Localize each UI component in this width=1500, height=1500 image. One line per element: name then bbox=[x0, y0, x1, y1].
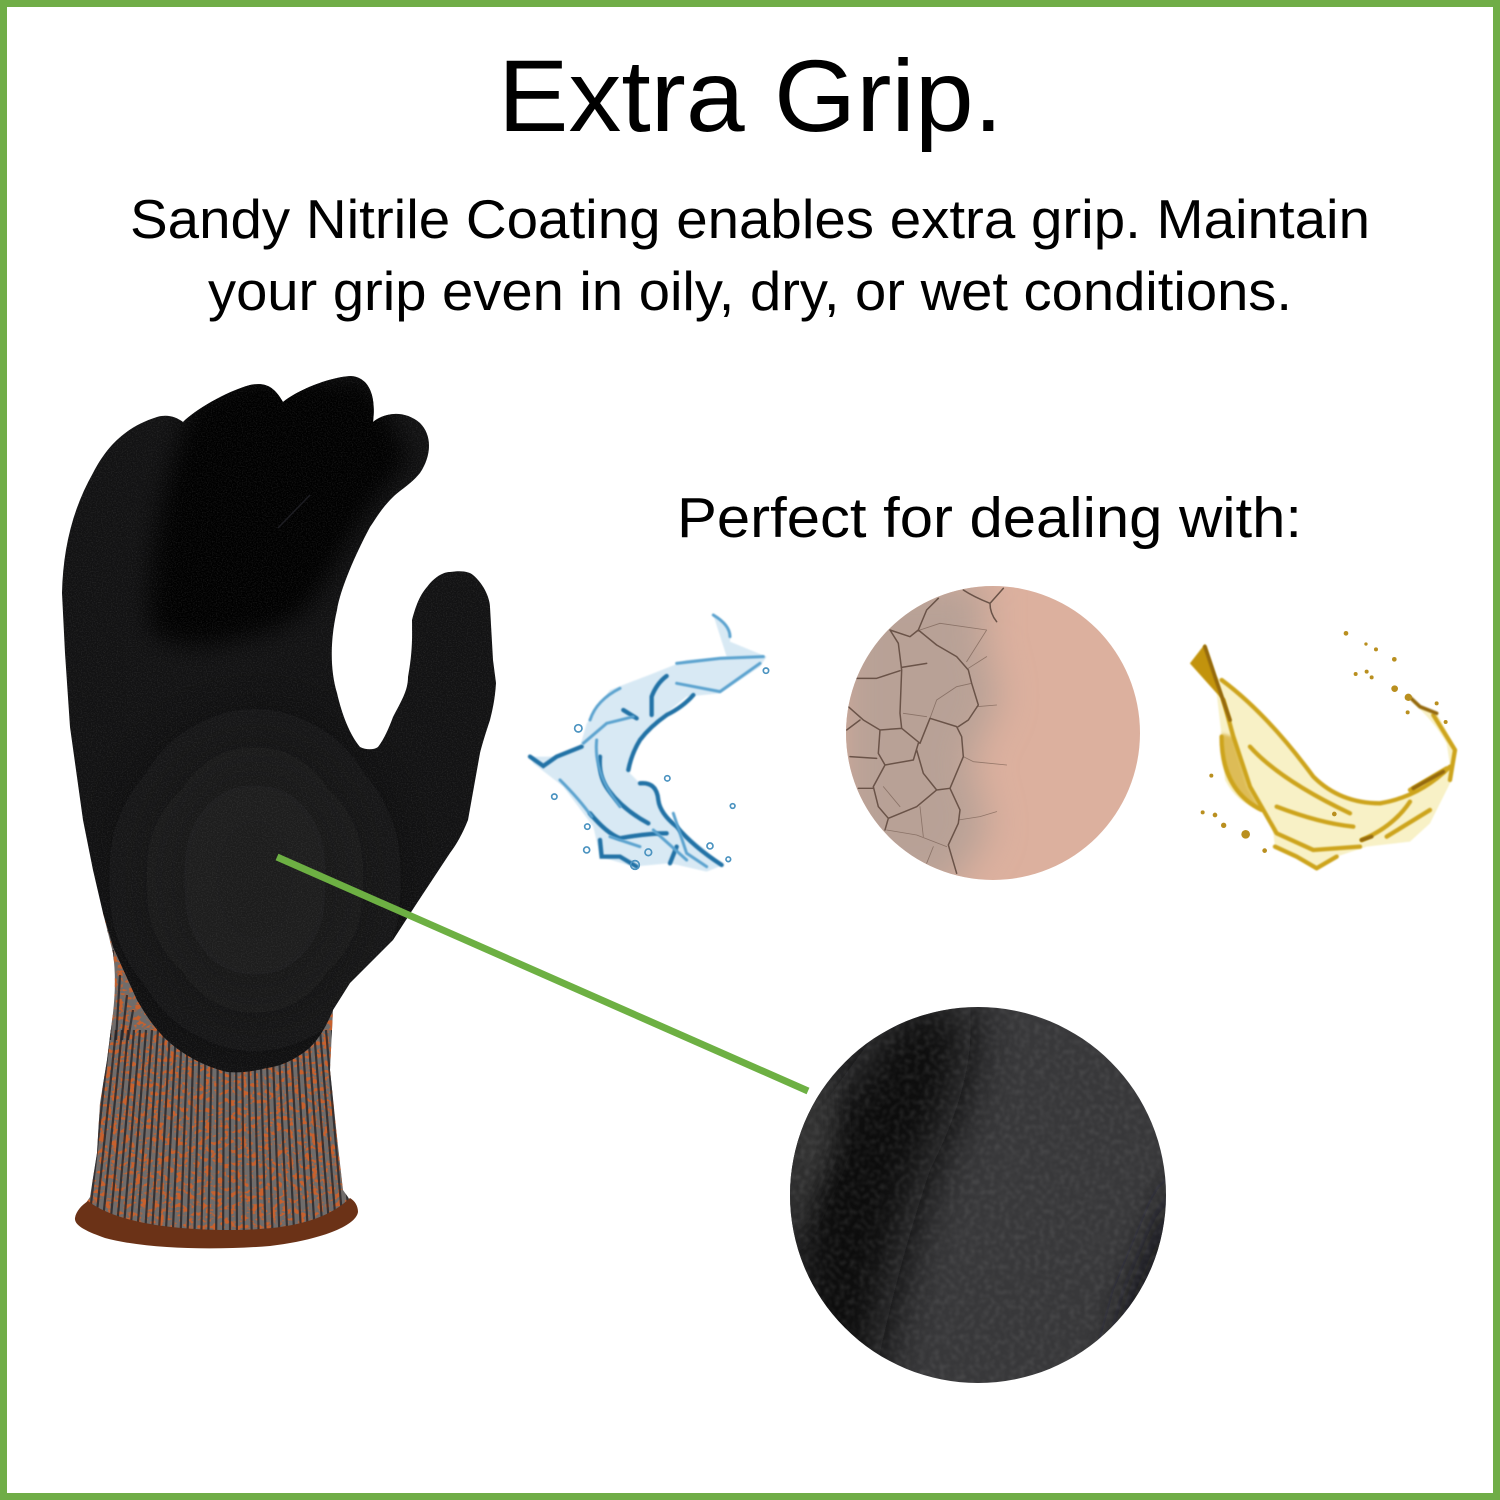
glove illustration bbox=[50, 370, 510, 1250]
photo: sandy nitrile close-up bbox=[790, 1007, 1166, 1383]
palm highlight bbox=[184, 786, 397, 1010]
photo: dry cracked skin bbox=[846, 586, 1140, 880]
dark fold bbox=[790, 1000, 971, 1400]
intro text: your grip even in oily, dry, or wet conditions. bbox=[208, 260, 1292, 322]
oil pouch bbox=[1221, 733, 1262, 811]
nitrile palm coating bbox=[50, 370, 510, 1080]
finger crease bbox=[278, 495, 310, 528]
finger shadows bbox=[149, 375, 410, 645]
sub heading: Perfect for dealing with: bbox=[677, 486, 1302, 550]
title: Extra Grip. bbox=[498, 39, 1003, 153]
icon: oil splash bbox=[1190, 631, 1457, 870]
cuff rim bbox=[75, 1198, 358, 1248]
cracks bbox=[847, 588, 1007, 873]
knitted cuff bbox=[86, 913, 350, 1230]
dry skin tone bbox=[840, 580, 1000, 890]
icon: water splash bbox=[530, 615, 769, 872]
intro text: Sandy Nitrile Coating enables extra grip. Maintain bbox=[130, 188, 1370, 250]
right shadow bbox=[1096, 1178, 1166, 1341]
intro text bbox=[130, 188, 1370, 322]
callout line bbox=[277, 857, 808, 1091]
